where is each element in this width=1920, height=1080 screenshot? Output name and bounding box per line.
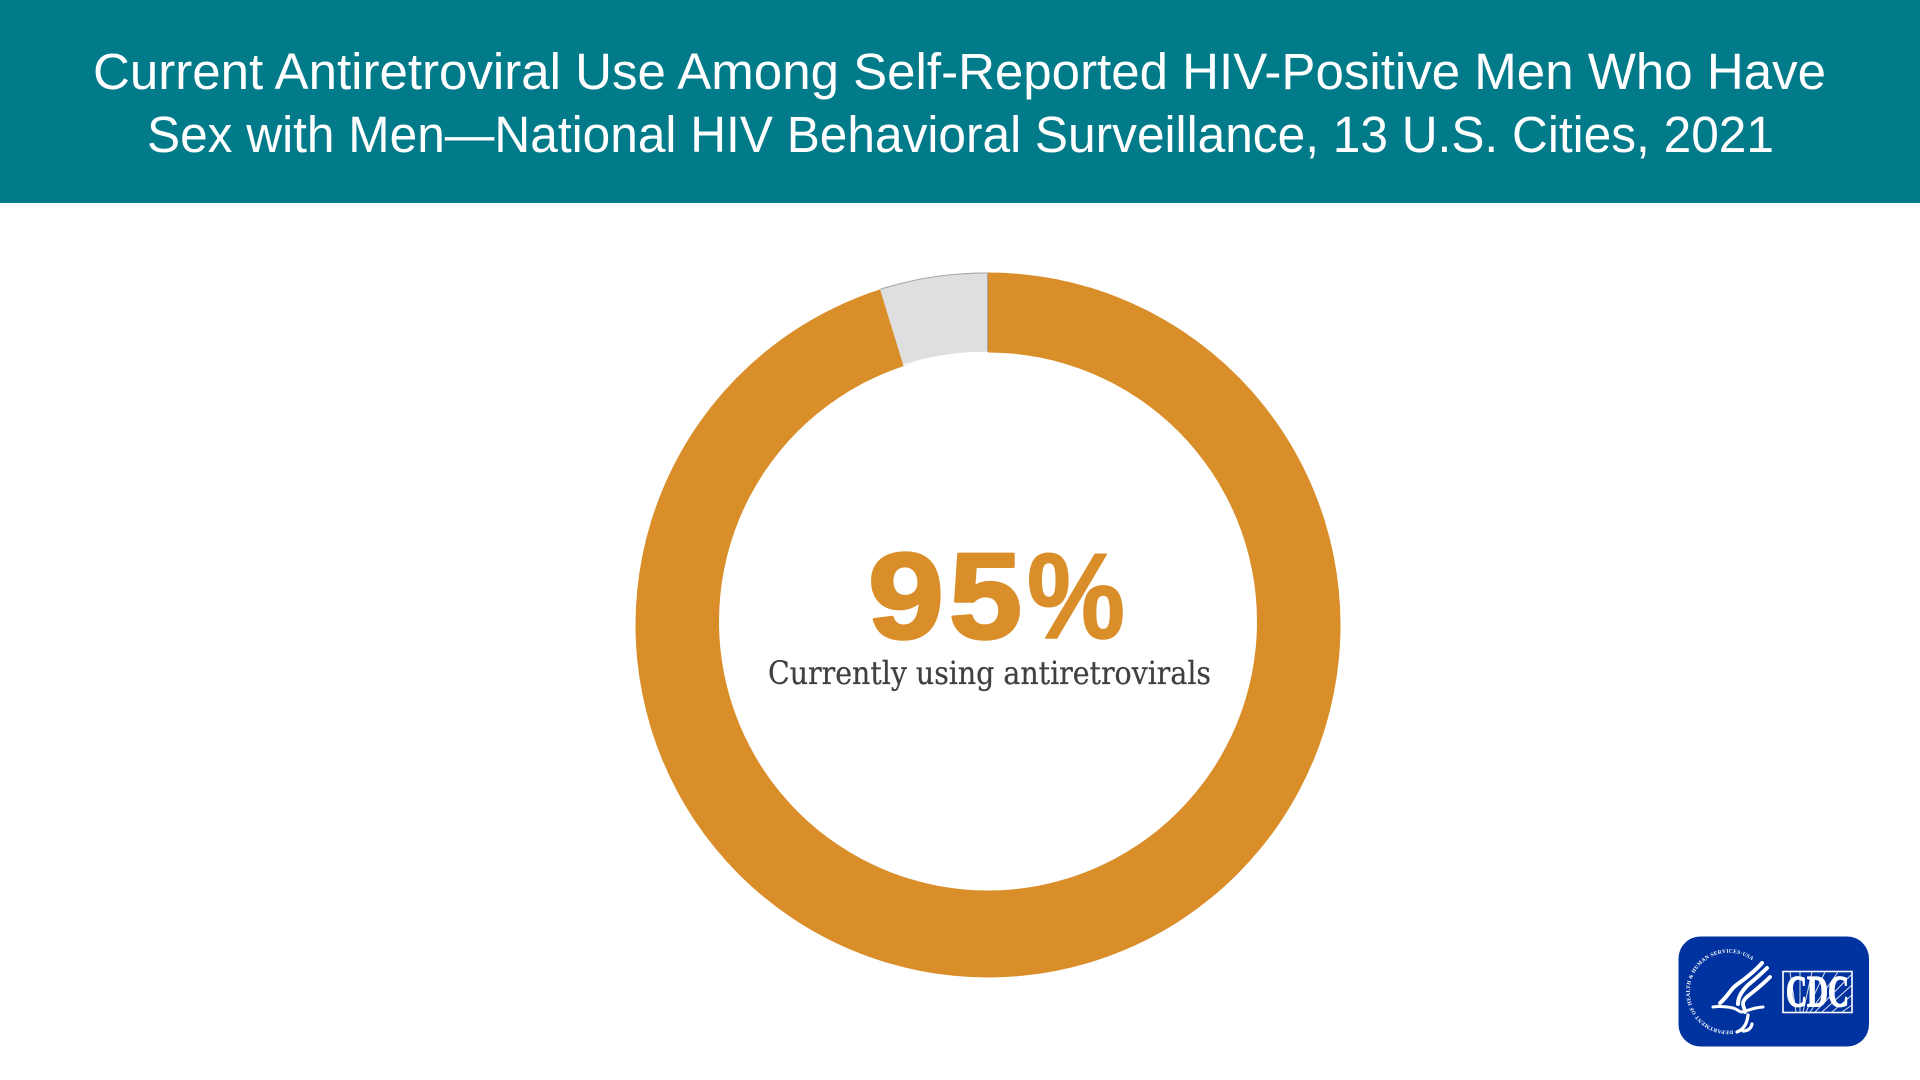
- icon: CDC box: [1783, 967, 1852, 1016]
- title banner: [0, 0, 1920, 203]
- donut chart: 95% currently using antiretrovirals: [636, 272, 1340, 978]
- icon: HHS eagle: [1713, 963, 1770, 1032]
- center value: 95%: [868, 528, 1125, 664]
- logo: HHS and CDC: [1678, 936, 1869, 1046]
- title text: Sex with Men—National HIV Behavioral Surveillance, 13 U.S. Cities, 2021: [147, 106, 1774, 163]
- remaining segment: 5%: [880, 273, 988, 365]
- icon: HHS seal ring text: DEPARTMENT OF HEALTH & HUMAN SERVICES·USA: [1686, 949, 1753, 1034]
- title text: Current Antiretroviral Use Among Self-Reported HIV-Positive Men Who Have: [93, 43, 1826, 100]
- center value: 95%: %: [1027, 528, 1125, 664]
- icon: CDC box: CDC: [1786, 967, 1849, 1016]
- center label: Currently using antiretrovirals: [768, 654, 1211, 692]
- center value: 95%: 5: [949, 528, 1022, 664]
- center value: 95%: 9: [868, 528, 944, 664]
- title text: [93, 43, 1826, 163]
